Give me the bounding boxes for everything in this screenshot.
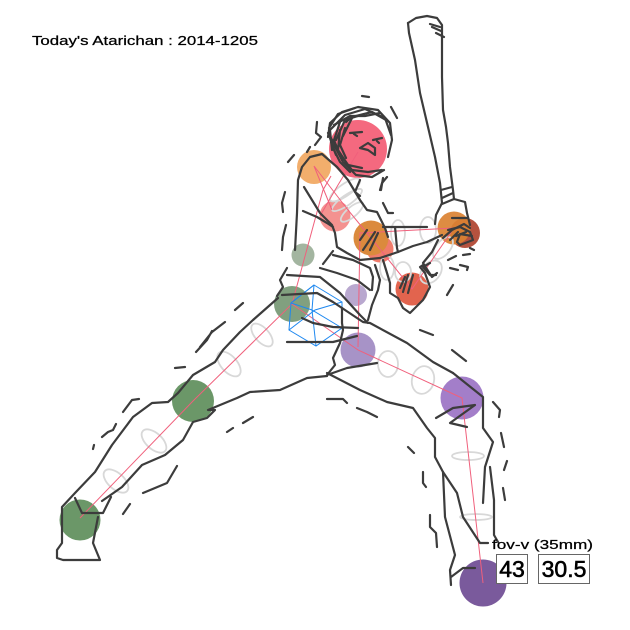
joint markers	[60, 120, 506, 606]
title: Today's Atarichan : 2014-1205	[32, 33, 258, 48]
torso and arm sketch	[277, 122, 470, 375]
gray limb ellipses	[99, 175, 492, 520]
fov value box: 30.5: 30.5	[542, 556, 586, 582]
right leg sketch	[327, 330, 507, 585]
blue camera frustum	[289, 285, 342, 346]
red skeleton lines	[80, 152, 483, 583]
bat outline	[408, 16, 454, 204]
head sketch	[328, 96, 397, 196]
left leg sketch	[57, 298, 327, 560]
hands on bat sketch	[443, 218, 474, 295]
fov value box: 43: 43	[499, 556, 525, 582]
fov label: fov-v (35mm)	[492, 537, 593, 552]
